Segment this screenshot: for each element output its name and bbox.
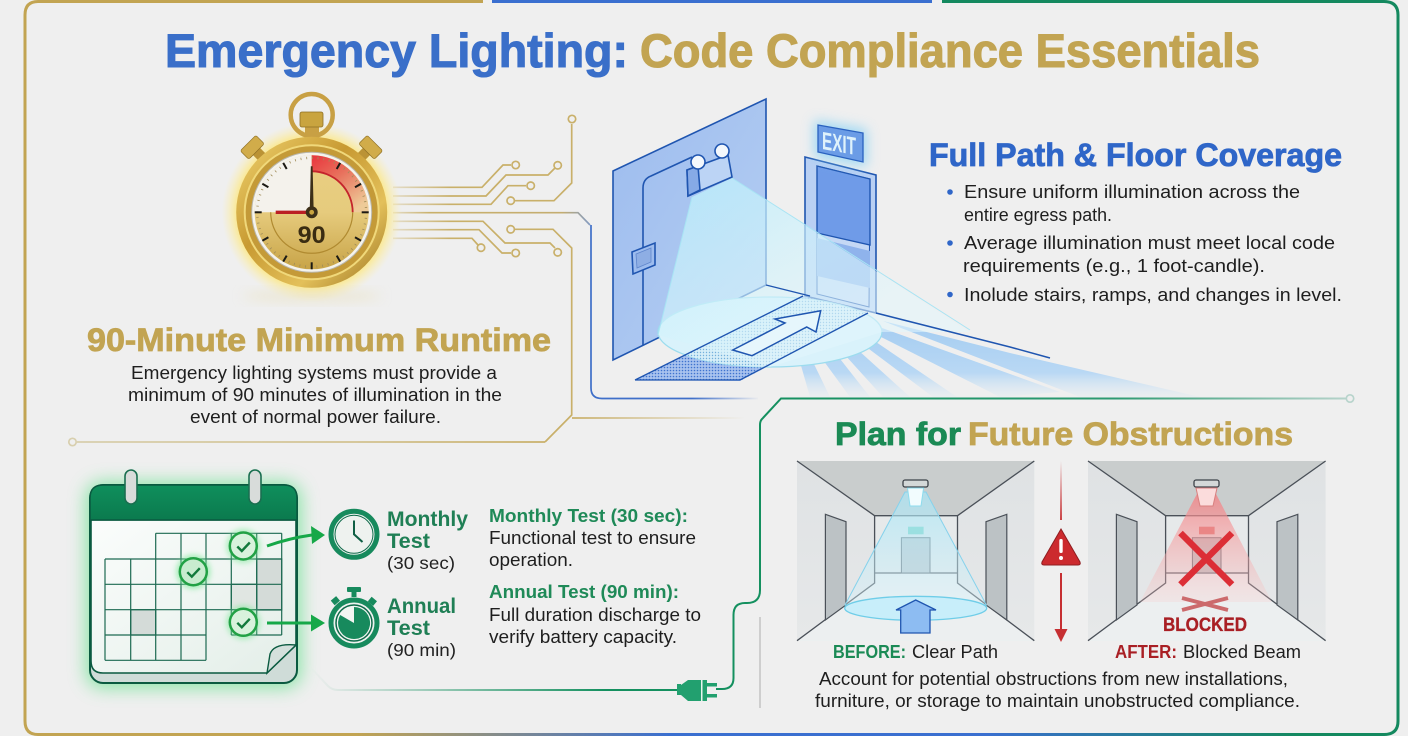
heading: runtime: 90-Minute Minimum Runtime (87, 322, 551, 358)
green power cable with plug (310, 395, 1354, 701)
red cross (1180, 533, 1232, 584)
emergency light fixture (687, 144, 732, 196)
calendar rings (125, 470, 261, 504)
exit sign (814, 120, 867, 167)
stopwatch icon (222, 94, 402, 302)
heading: obstructions (835, 416, 1293, 452)
illustration: lit egress path: EXIT (822, 127, 856, 161)
text: monthly description: Functional test to ensure (489, 528, 696, 548)
arrow (733, 311, 821, 356)
text: annual description (489, 582, 701, 647)
up arrow (896, 600, 936, 633)
panel: before clear path (797, 461, 1034, 641)
calendar grid (105, 533, 282, 660)
text: monthly description (489, 506, 696, 570)
icon: monthly clock (331, 511, 377, 557)
labels: annual test (387, 595, 456, 660)
arrow: calendar to monthly test (267, 526, 325, 546)
text: monthly description: operation. (489, 550, 573, 570)
blocked label: BLOCKED (1163, 615, 1247, 636)
arrow: calendar to annual test (267, 614, 325, 632)
title: Code Compliance Essentials (640, 24, 1260, 77)
text: annual description: verify battery capacity. (489, 627, 677, 647)
stopwatch icon: 90 (298, 222, 326, 249)
icon: plug (677, 680, 717, 701)
calendar icon (86, 470, 301, 688)
labels: monthly test: (30 sec) (387, 553, 455, 573)
bullet list: coverage: Ensure uniform illumination across the (964, 182, 1300, 202)
labels: monthly test: Test (387, 530, 430, 553)
text: annual description: Annual Test (90 min): (489, 582, 679, 602)
page curl (267, 645, 296, 673)
panel: after blocked beam (1088, 461, 1326, 641)
icon: annual stopwatch (331, 587, 377, 646)
caption: before: BEFORE: (833, 642, 906, 662)
labels: annual test: Test (387, 617, 430, 640)
caption: before (833, 642, 998, 662)
divider (759, 617, 761, 708)
text: runtime description (128, 363, 502, 427)
caption: before: Clear Path (912, 642, 998, 662)
text: monthly description: Monthly Test (30 sec): (489, 506, 688, 526)
path (686, 298, 865, 367)
heading: coverage: Full Path & Floor Coverage (929, 137, 1342, 173)
text: runtime description: minimum of 90 minutes of illumination in the (128, 385, 502, 405)
text: obstruction guidance: Account for potential obstructions from new installations, (819, 669, 1288, 689)
small cross (1182, 598, 1228, 610)
labels: annual test: (90 min) (387, 640, 456, 660)
heading: obstructions: Plan for (835, 416, 961, 452)
heading: obstructions: Future Obstructions (968, 416, 1293, 452)
light cone (658, 178, 970, 367)
title (165, 24, 1260, 77)
caption: after: Blocked Beam (1183, 642, 1301, 662)
bullet list: coverage: entire egress path. (964, 205, 1112, 225)
bullet list: coverage: requirements (e.g., 1 foot-candle). (963, 256, 1265, 276)
caption: after (1115, 642, 1301, 662)
labels: annual test: Annual (387, 595, 456, 618)
text: obstruction guidance: furniture, or storage to maintain unobstructed compliance. (815, 691, 1300, 711)
text: runtime description: event of normal power failure. (190, 407, 441, 427)
bullet list: coverage (947, 182, 1342, 305)
labels: monthly test: Monthly (387, 508, 468, 531)
floor light pool (635, 296, 868, 381)
caption: after: AFTER: (1115, 642, 1177, 662)
floor rays (800, 321, 1200, 397)
side wall (613, 99, 766, 360)
check marks (176, 529, 260, 639)
door (805, 157, 876, 313)
labels: monthly test (387, 508, 468, 573)
title: Emergency Lighting: (165, 24, 628, 77)
warning divider with arrow (1042, 461, 1080, 642)
bullet list: coverage: Average illumination must meet local code (964, 233, 1335, 253)
illustration: lit egress path (613, 99, 1200, 397)
text: obstruction guidance (815, 669, 1300, 711)
circuit traces (69, 115, 758, 446)
text: annual description: Full duration discharge to (489, 605, 701, 625)
text: runtime description: Emergency lighting systems must provide a (131, 363, 498, 383)
bullet list: coverage: Inolude stairs, ramps, and changes in level. (964, 285, 1342, 305)
